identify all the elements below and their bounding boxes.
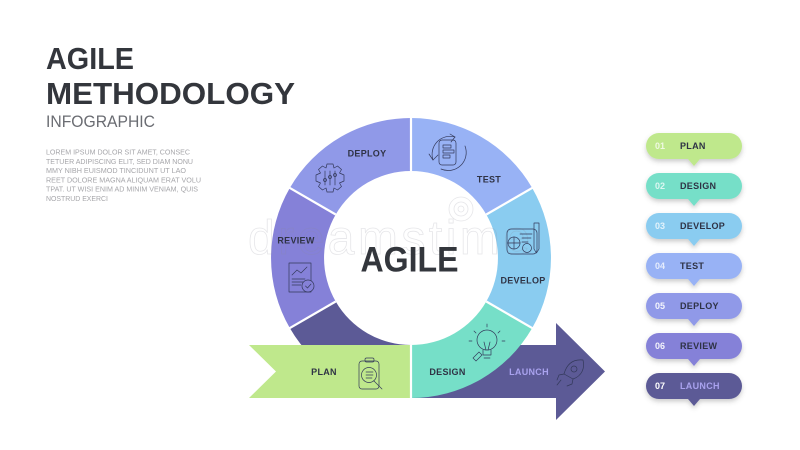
segment: deploy: [290, 118, 411, 214]
icon: test cycle: [429, 134, 466, 171]
title: METHODOLOGY: [46, 76, 295, 111]
pill: 03 develop: DEVELOP: [680, 221, 725, 231]
text block: description: TPAT. UT WISI ENIM AD MINIM VENIAM, QUIS: [46, 184, 198, 194]
title: [46, 41, 295, 111]
pill: 05 deploy: DEPLOY: [680, 301, 719, 311]
icon: develop blueprint: [507, 223, 539, 254]
pill: 03 develop: 03: [655, 221, 665, 231]
label: review: REVIEW: [277, 236, 315, 246]
label: test: TEST: [477, 174, 501, 184]
title: AGILE: [46, 41, 134, 76]
pill: 01 plan: PLAN: [680, 141, 706, 151]
pill: 02 design: DESIGN: [680, 181, 716, 191]
pill: 07 launch: 07: [655, 381, 665, 391]
pill: 06 review: 06: [655, 341, 665, 351]
icon: review report: [289, 263, 314, 292]
segment: design: [411, 302, 532, 398]
text block: description: TETUER ADIPISCING ELIT, SED DIAM NONU: [46, 157, 193, 166]
segment: launch ring part: [290, 302, 411, 398]
pill: 01 plan: [646, 133, 742, 166]
label: deploy: DEPLOY: [348, 148, 386, 158]
label: design: DESIGN: [429, 367, 466, 377]
pill: 07 launch: LAUNCH: [680, 381, 720, 391]
text block: description: [46, 148, 201, 203]
text block: description: LOREM IPSUM DOLOR SIT AMET, CONSEC: [46, 148, 191, 156]
pill: 02 design: [646, 173, 742, 206]
pill: 04 test: TEST: [680, 261, 704, 271]
arrow: launch: [411, 323, 605, 420]
icon: gear: [316, 164, 344, 192]
text block: description: MMY NIBH EUISMOD TINCIDUNT UT LAO: [46, 166, 186, 175]
pill: 06 review: [646, 333, 742, 366]
pill: 02 design: 02: [655, 181, 665, 191]
label: plan: PLAN: [311, 367, 337, 377]
pill: 07 launch: [646, 373, 742, 406]
icon: launch rocket: [557, 360, 584, 386]
icon: design light bulb: [469, 324, 505, 361]
center label: AGILE: [360, 240, 458, 280]
segment: test: [411, 118, 532, 214]
pill: 05 deploy: [646, 293, 742, 326]
legend list: [646, 133, 742, 406]
pill: 01 plan: 01: [655, 141, 665, 151]
label: launch: LAUNCH: [509, 367, 549, 377]
pill: 06 review: REVIEW: [680, 341, 718, 351]
subtitle: INFOGRAPHIC: [46, 112, 155, 131]
segment: review: [271, 188, 336, 328]
pill: 04 test: 04: [655, 261, 665, 271]
icon: plan clipboard: [359, 358, 382, 389]
segment: develop: [486, 188, 551, 328]
label: develop: DEVELOP: [500, 276, 546, 286]
text block: description: REET DOLORE MAGNA ALIQUAM ERAT VOLU: [46, 175, 201, 184]
pill: 05 deploy: 05: [655, 301, 665, 311]
segment: plan banner: [249, 345, 410, 398]
watermark: dreamstime: [248, 212, 530, 265]
pill: 03 develop: [646, 213, 742, 246]
text block: description: NOSTRUD EXERCI: [46, 194, 108, 203]
pill: 04 test: [646, 253, 742, 286]
